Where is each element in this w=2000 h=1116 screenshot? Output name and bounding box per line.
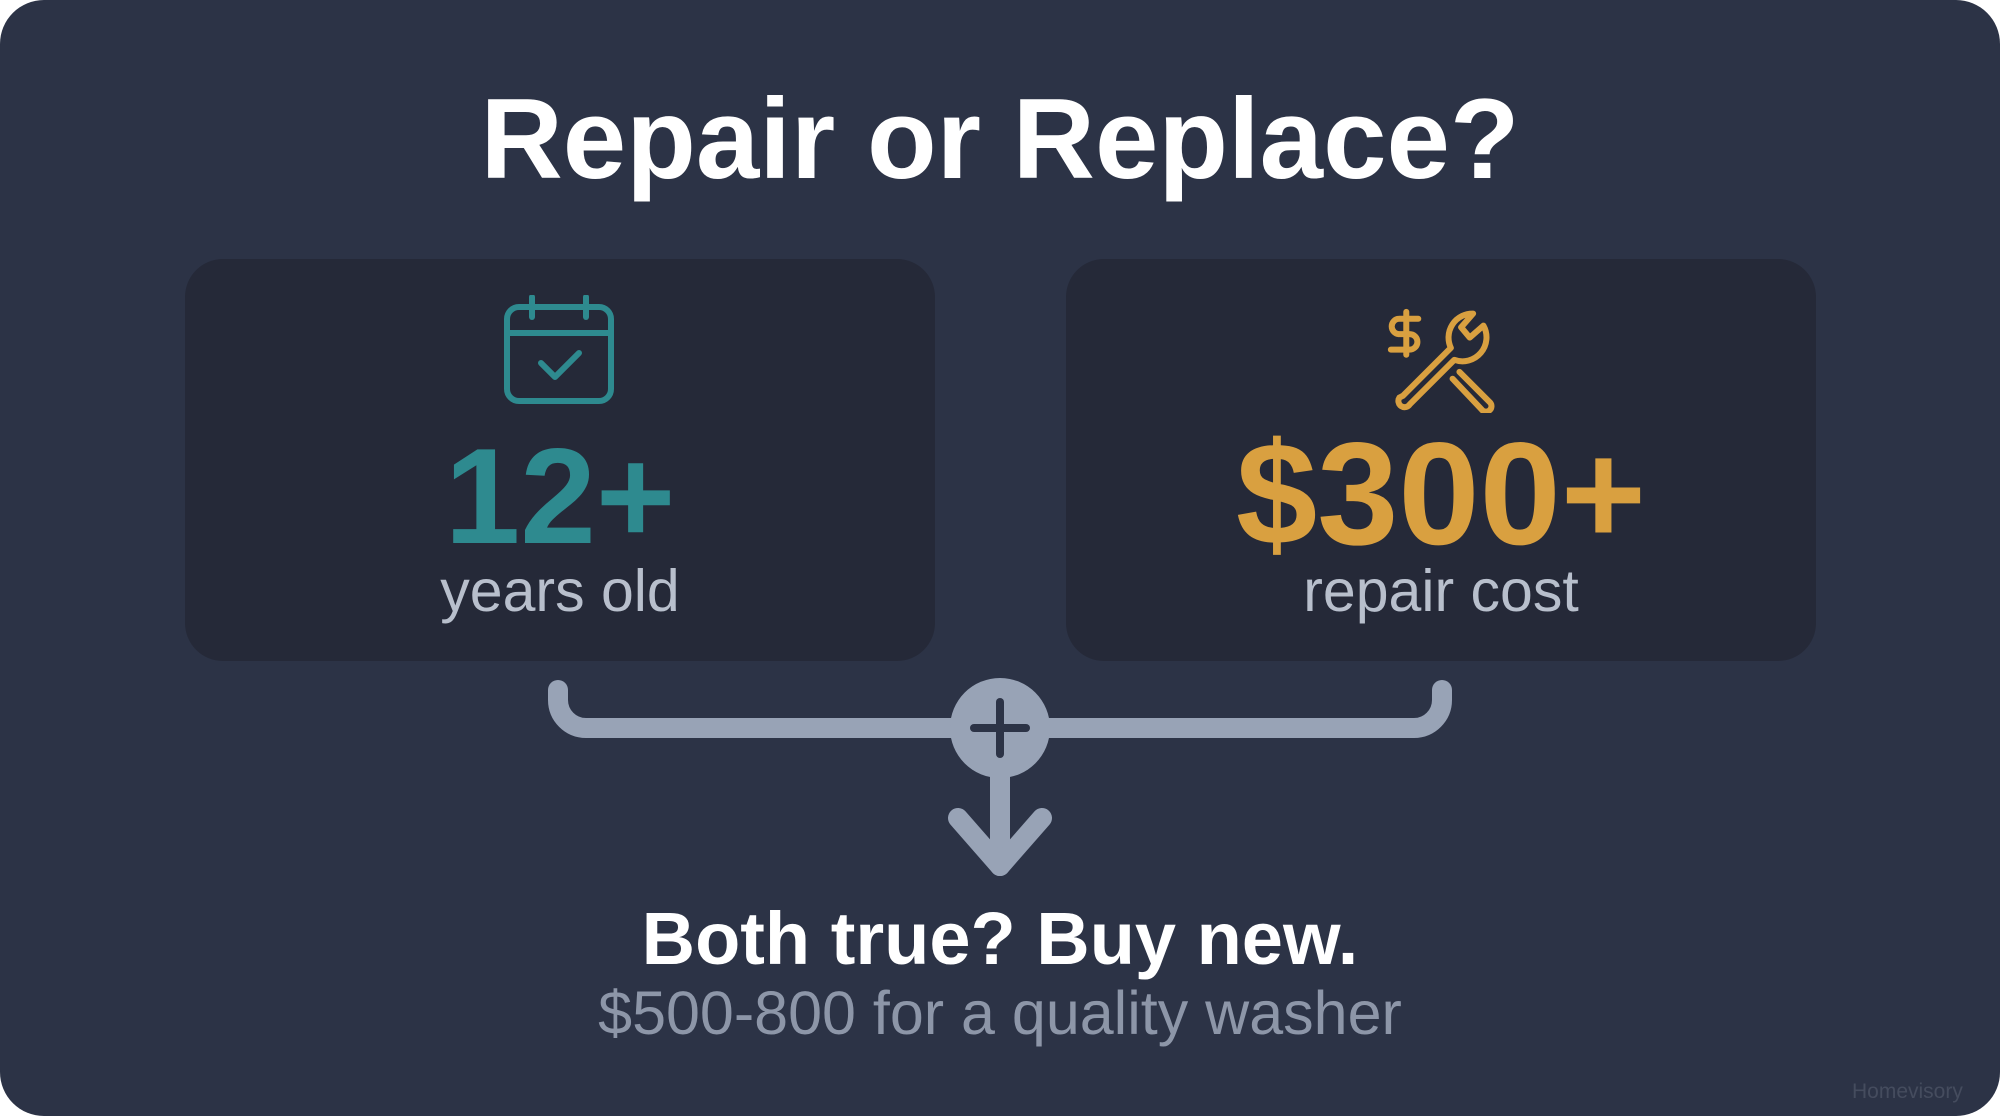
stat: 12+: 12+ [445,420,675,572]
icon: calendar [504,295,614,404]
panel: cost [1066,259,1816,661]
label: years old: years old [440,558,680,624]
title: Repair or Replace? [480,76,1520,203]
stat: $300+: $300+ [1236,412,1646,575]
panel: age [185,259,935,661]
label: repair cost: repair cost [1303,558,1579,624]
icon: dollar wrench [1388,308,1494,413]
conclusion heading: Both true? Buy new. [642,897,1358,980]
connector: bracket with plus and arrow [548,678,1452,876]
watermark: Homevisory [1852,1080,1963,1103]
conclusion subtext: $500-800 for a quality washer [598,979,1402,1047]
